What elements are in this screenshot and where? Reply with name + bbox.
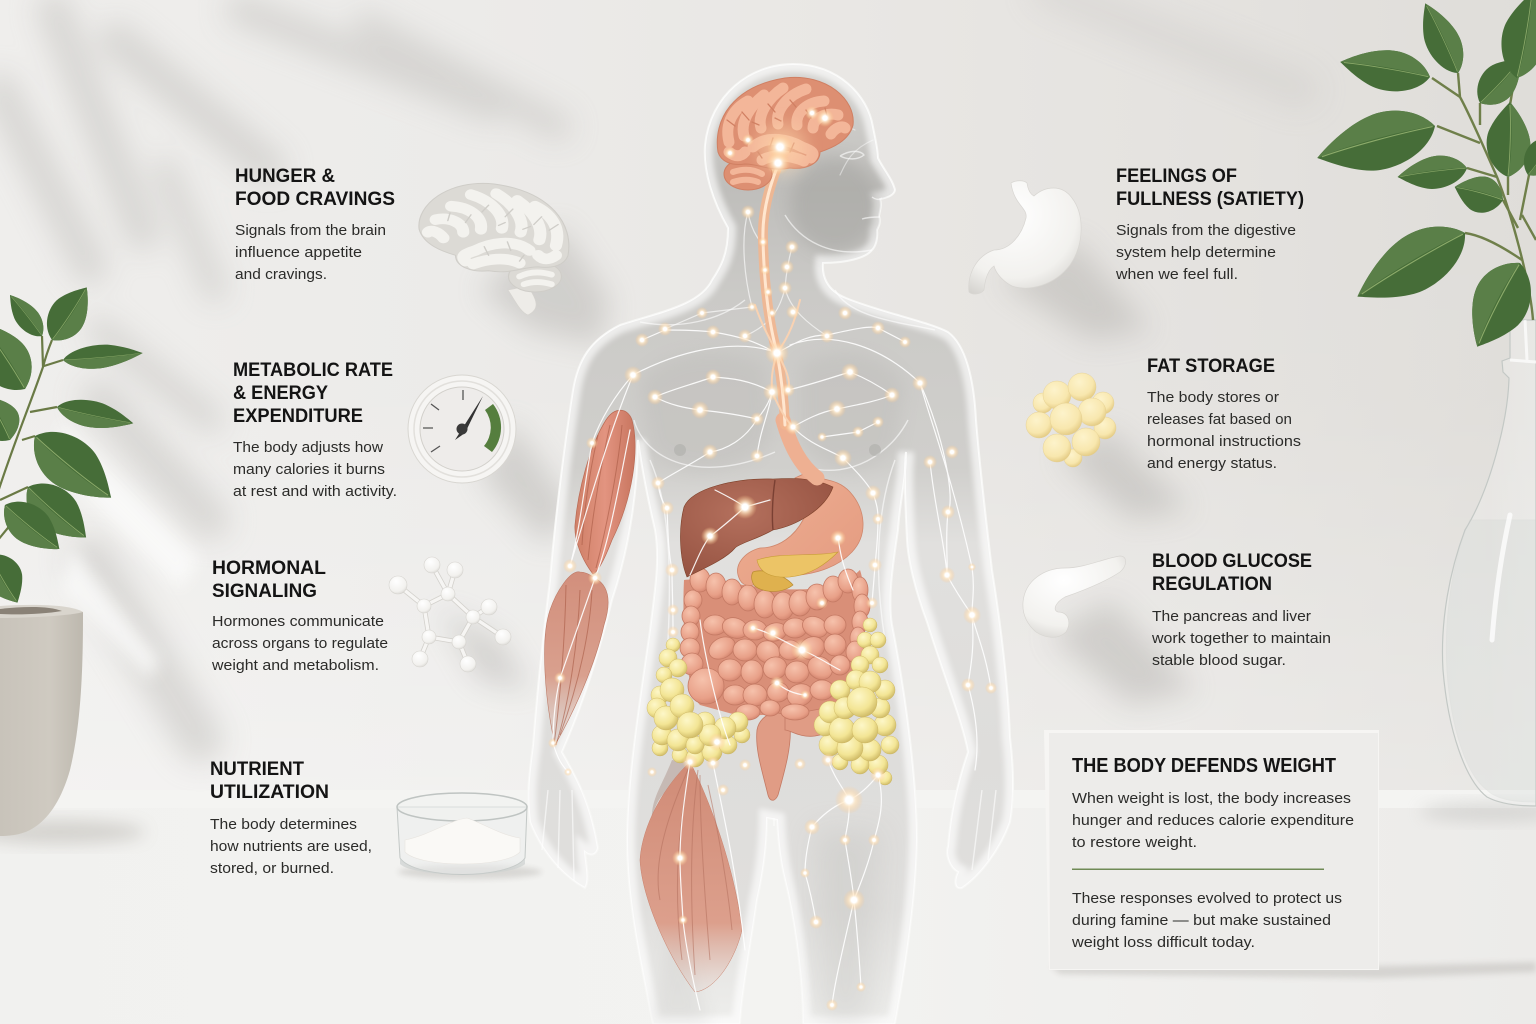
text: blood glucose regulation: stable blood sugar. [1152, 652, 1286, 669]
right fat deposit [814, 618, 899, 785]
text: fat storage: FAT STORAGE [1147, 356, 1275, 377]
plant leaves [0, 277, 144, 612]
text: metabolic rate: many calories it burns [233, 461, 385, 478]
text: fat storage: and energy status. [1147, 455, 1277, 472]
liver lobe division [772, 480, 775, 530]
left fat deposit [647, 638, 750, 767]
panel body text bottom: These responses evolved to protect us [1072, 890, 1342, 907]
text: fat storage: hormonal instructions [1147, 433, 1301, 450]
text: feelings of fullness: system help determine [1116, 244, 1276, 261]
icon: dish of powder [397, 793, 542, 879]
text: hunger and food cravings [235, 166, 395, 283]
brain stem glow [758, 124, 806, 172]
text: feelings of fullness: when we feel full. [1115, 266, 1238, 283]
human body figure [528, 64, 1013, 1024]
text: hunger and food cravings: Signals from the brain [235, 222, 386, 239]
text: hormonal signaling [211, 558, 388, 674]
text: metabolic rate [233, 360, 397, 500]
body inner shading [528, 64, 1013, 1024]
icon: white stomach [969, 181, 1081, 294]
nipples [674, 444, 881, 456]
text: blood glucose regulation: REGULATION [1152, 574, 1272, 595]
left potted plant [0, 277, 145, 844]
text: metabolic rate: at rest and with activity. [233, 483, 397, 500]
text: nutrient utilization: UTILIZATION [210, 782, 329, 803]
text: hormonal signaling: SIGNALING [212, 581, 317, 602]
text: nutrient utilization: stored, or burned. [210, 860, 334, 877]
panel heading: THE BODY DEFENDS WEIGHT [1072, 755, 1336, 777]
text: hunger and food cravings: and cravings. [235, 266, 327, 283]
icon: yellow fat cluster [1026, 373, 1116, 467]
brain in the head [717, 77, 853, 190]
text: feelings of fullness: FEELINGS OF [1116, 166, 1237, 187]
text: hormonal signaling: across organs to regulate [212, 635, 388, 652]
gallbladder and duodenum [752, 571, 793, 591]
panel body text top: to restore weight. [1072, 834, 1197, 851]
text: nutrient utilization: how nutrients are used, [210, 838, 372, 855]
spinal cord and esophagus [755, 165, 817, 478]
liver [680, 479, 833, 577]
text: fat storage: The body stores or [1147, 389, 1279, 406]
text: hormonal signaling: weight and metabolism. [211, 657, 379, 674]
panel body text bottom: weight loss difficult today. [1071, 934, 1255, 951]
panel body text bottom [1071, 890, 1342, 951]
text: nutrient utilization: The body determines [210, 816, 357, 833]
large intestine and small intestine [680, 568, 870, 800]
powder [405, 818, 520, 864]
gauge green zone [484, 404, 501, 452]
body silhouette [528, 64, 1013, 1024]
text: metabolic rate: & ENERGY [233, 383, 328, 404]
text: hunger and food cravings: FOOD CRAVINGS [235, 189, 395, 210]
thigh muscles [640, 760, 742, 992]
text: hormonal signaling: HORMONAL [212, 558, 326, 579]
text: feelings of fullness: Signals from the digestive [1116, 222, 1296, 239]
text: fat storage [1147, 356, 1301, 472]
pot [0, 612, 83, 836]
glass vase [1420, 320, 1536, 822]
nerve network [553, 113, 991, 1010]
text: blood glucose regulation: The pancreas and liver [1152, 608, 1311, 625]
text: blood glucose regulation: work together to maintain [1151, 630, 1331, 647]
text: feelings of fullness: FULLNESS (SATIETY) [1116, 189, 1304, 210]
icon: white brain [419, 183, 569, 315]
vase water [1446, 520, 1536, 802]
panel body text top: When weight is lost, the body increases [1072, 790, 1351, 807]
stomach and esophagus [738, 472, 863, 585]
text: fat storage: releases fat based on [1147, 411, 1292, 428]
body contour lines [542, 151, 996, 880]
icon: white pancreas [1023, 556, 1126, 637]
plant stems [0, 336, 63, 540]
text: feelings of fullness [1115, 166, 1304, 283]
panel body text bottom: during famine — but make sustained [1072, 912, 1331, 929]
text: nutrient utilization [210, 759, 372, 877]
right plant branch [1310, 0, 1536, 360]
panel: the body defends weight [1044, 730, 1536, 978]
text: hormonal signaling: Hormones communicate [212, 613, 384, 630]
panel body text top [1072, 790, 1354, 851]
text: blood glucose regulation [1151, 551, 1331, 669]
gauge needle [455, 396, 483, 440]
text: metabolic rate: METABOLIC RATE [233, 360, 393, 381]
text: metabolic rate: EXPENDITURE [233, 406, 363, 427]
text: nutrient utilization: NUTRIENT [210, 759, 304, 780]
glowing nerve nodes [548, 106, 997, 1011]
text: blood glucose regulation: BLOOD GLUCOSE [1152, 551, 1312, 572]
wall shadows cast by icons [440, 225, 1195, 705]
panel body text top: hunger and reduces calorie expenditure [1072, 812, 1354, 829]
text: metabolic rate: The body adjusts how [233, 439, 383, 456]
arm muscles [545, 410, 635, 745]
text: hunger and food cravings: influence appetite [235, 244, 362, 261]
icon: metabolic gauge [408, 375, 516, 483]
pancreas [757, 552, 838, 577]
text: hunger and food cravings: HUNGER & [235, 166, 335, 187]
icon: molecule [389, 557, 511, 672]
